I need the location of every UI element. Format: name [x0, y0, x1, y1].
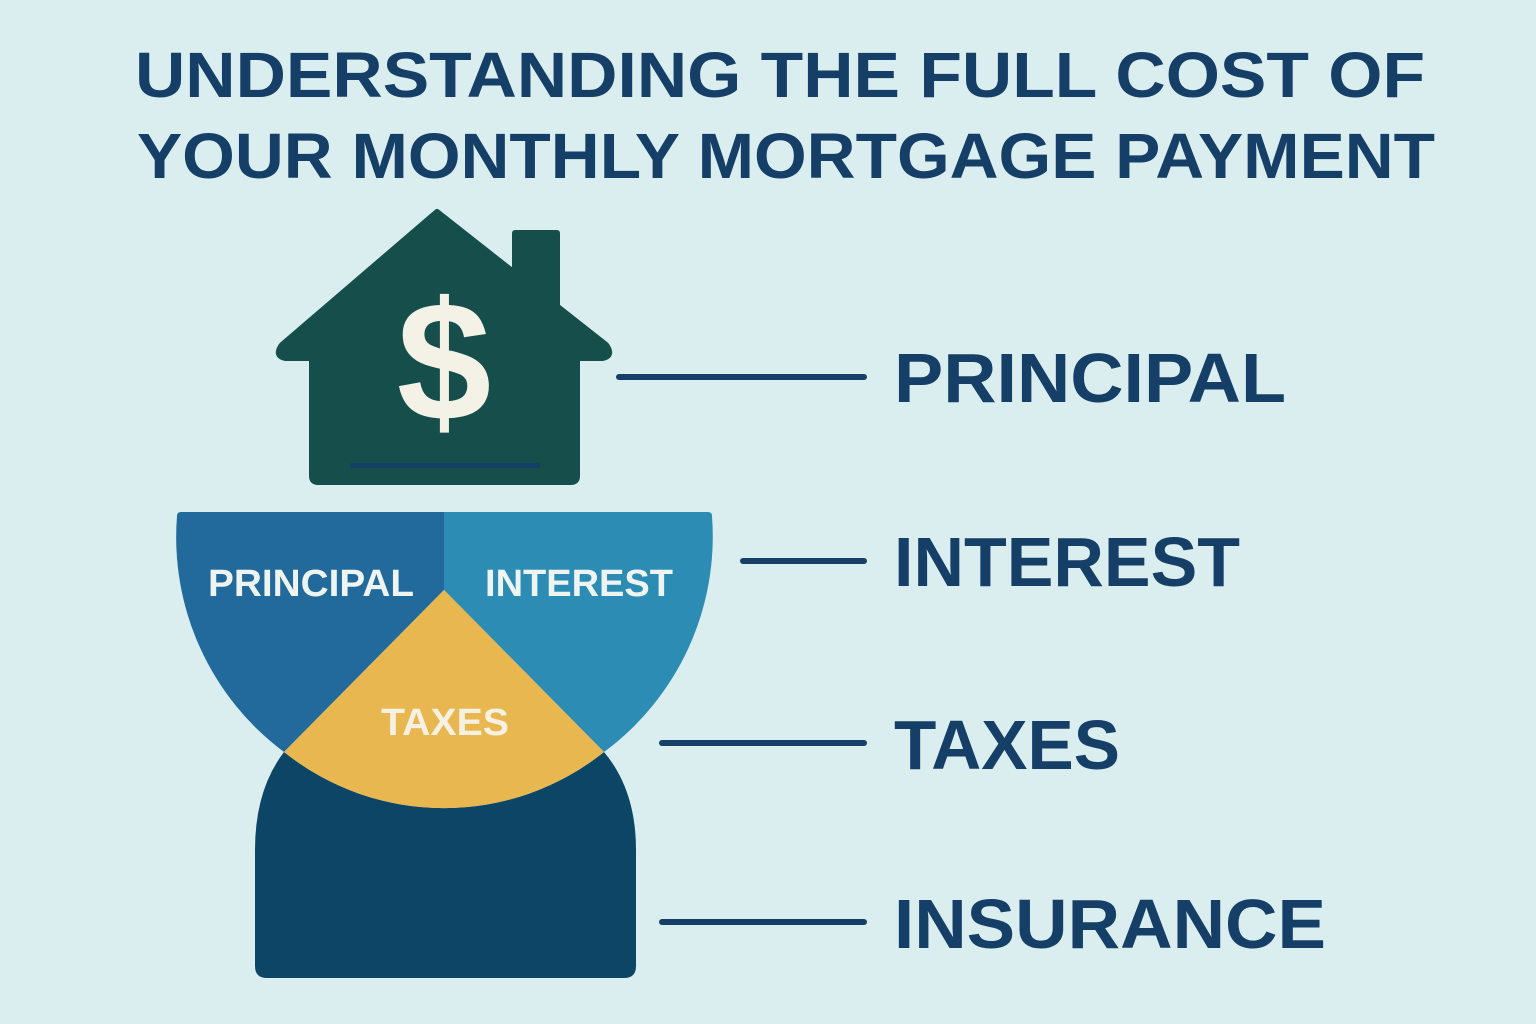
label: principal: PRINCIPAL: [894, 339, 1286, 417]
segment: principal: PRINCIPAL: [208, 563, 414, 605]
title: UNDERSTANDING THE FULL COST OF: [135, 39, 1425, 111]
segment: insurance base: [255, 752, 636, 978]
segment: principal: [176, 512, 444, 752]
icon: house with dollar sign: [279, 212, 609, 482]
label: taxes: TAXES: [894, 706, 1120, 784]
icon: house with dollar sign: $: [397, 267, 491, 457]
label: interest: INTEREST: [894, 523, 1240, 601]
segment: interest: [444, 512, 713, 752]
segment: taxes: [284, 590, 604, 808]
segment: taxes: TAXES: [381, 702, 509, 744]
chart: mortgage breakdown bowl: [176, 512, 713, 978]
title: YOUR MONTHLY MORTGAGE PAYMENT: [137, 120, 1435, 192]
title: [135, 39, 1435, 192]
label: insurance: INSURANCE: [894, 885, 1326, 963]
segment: interest: INTEREST: [485, 563, 673, 605]
